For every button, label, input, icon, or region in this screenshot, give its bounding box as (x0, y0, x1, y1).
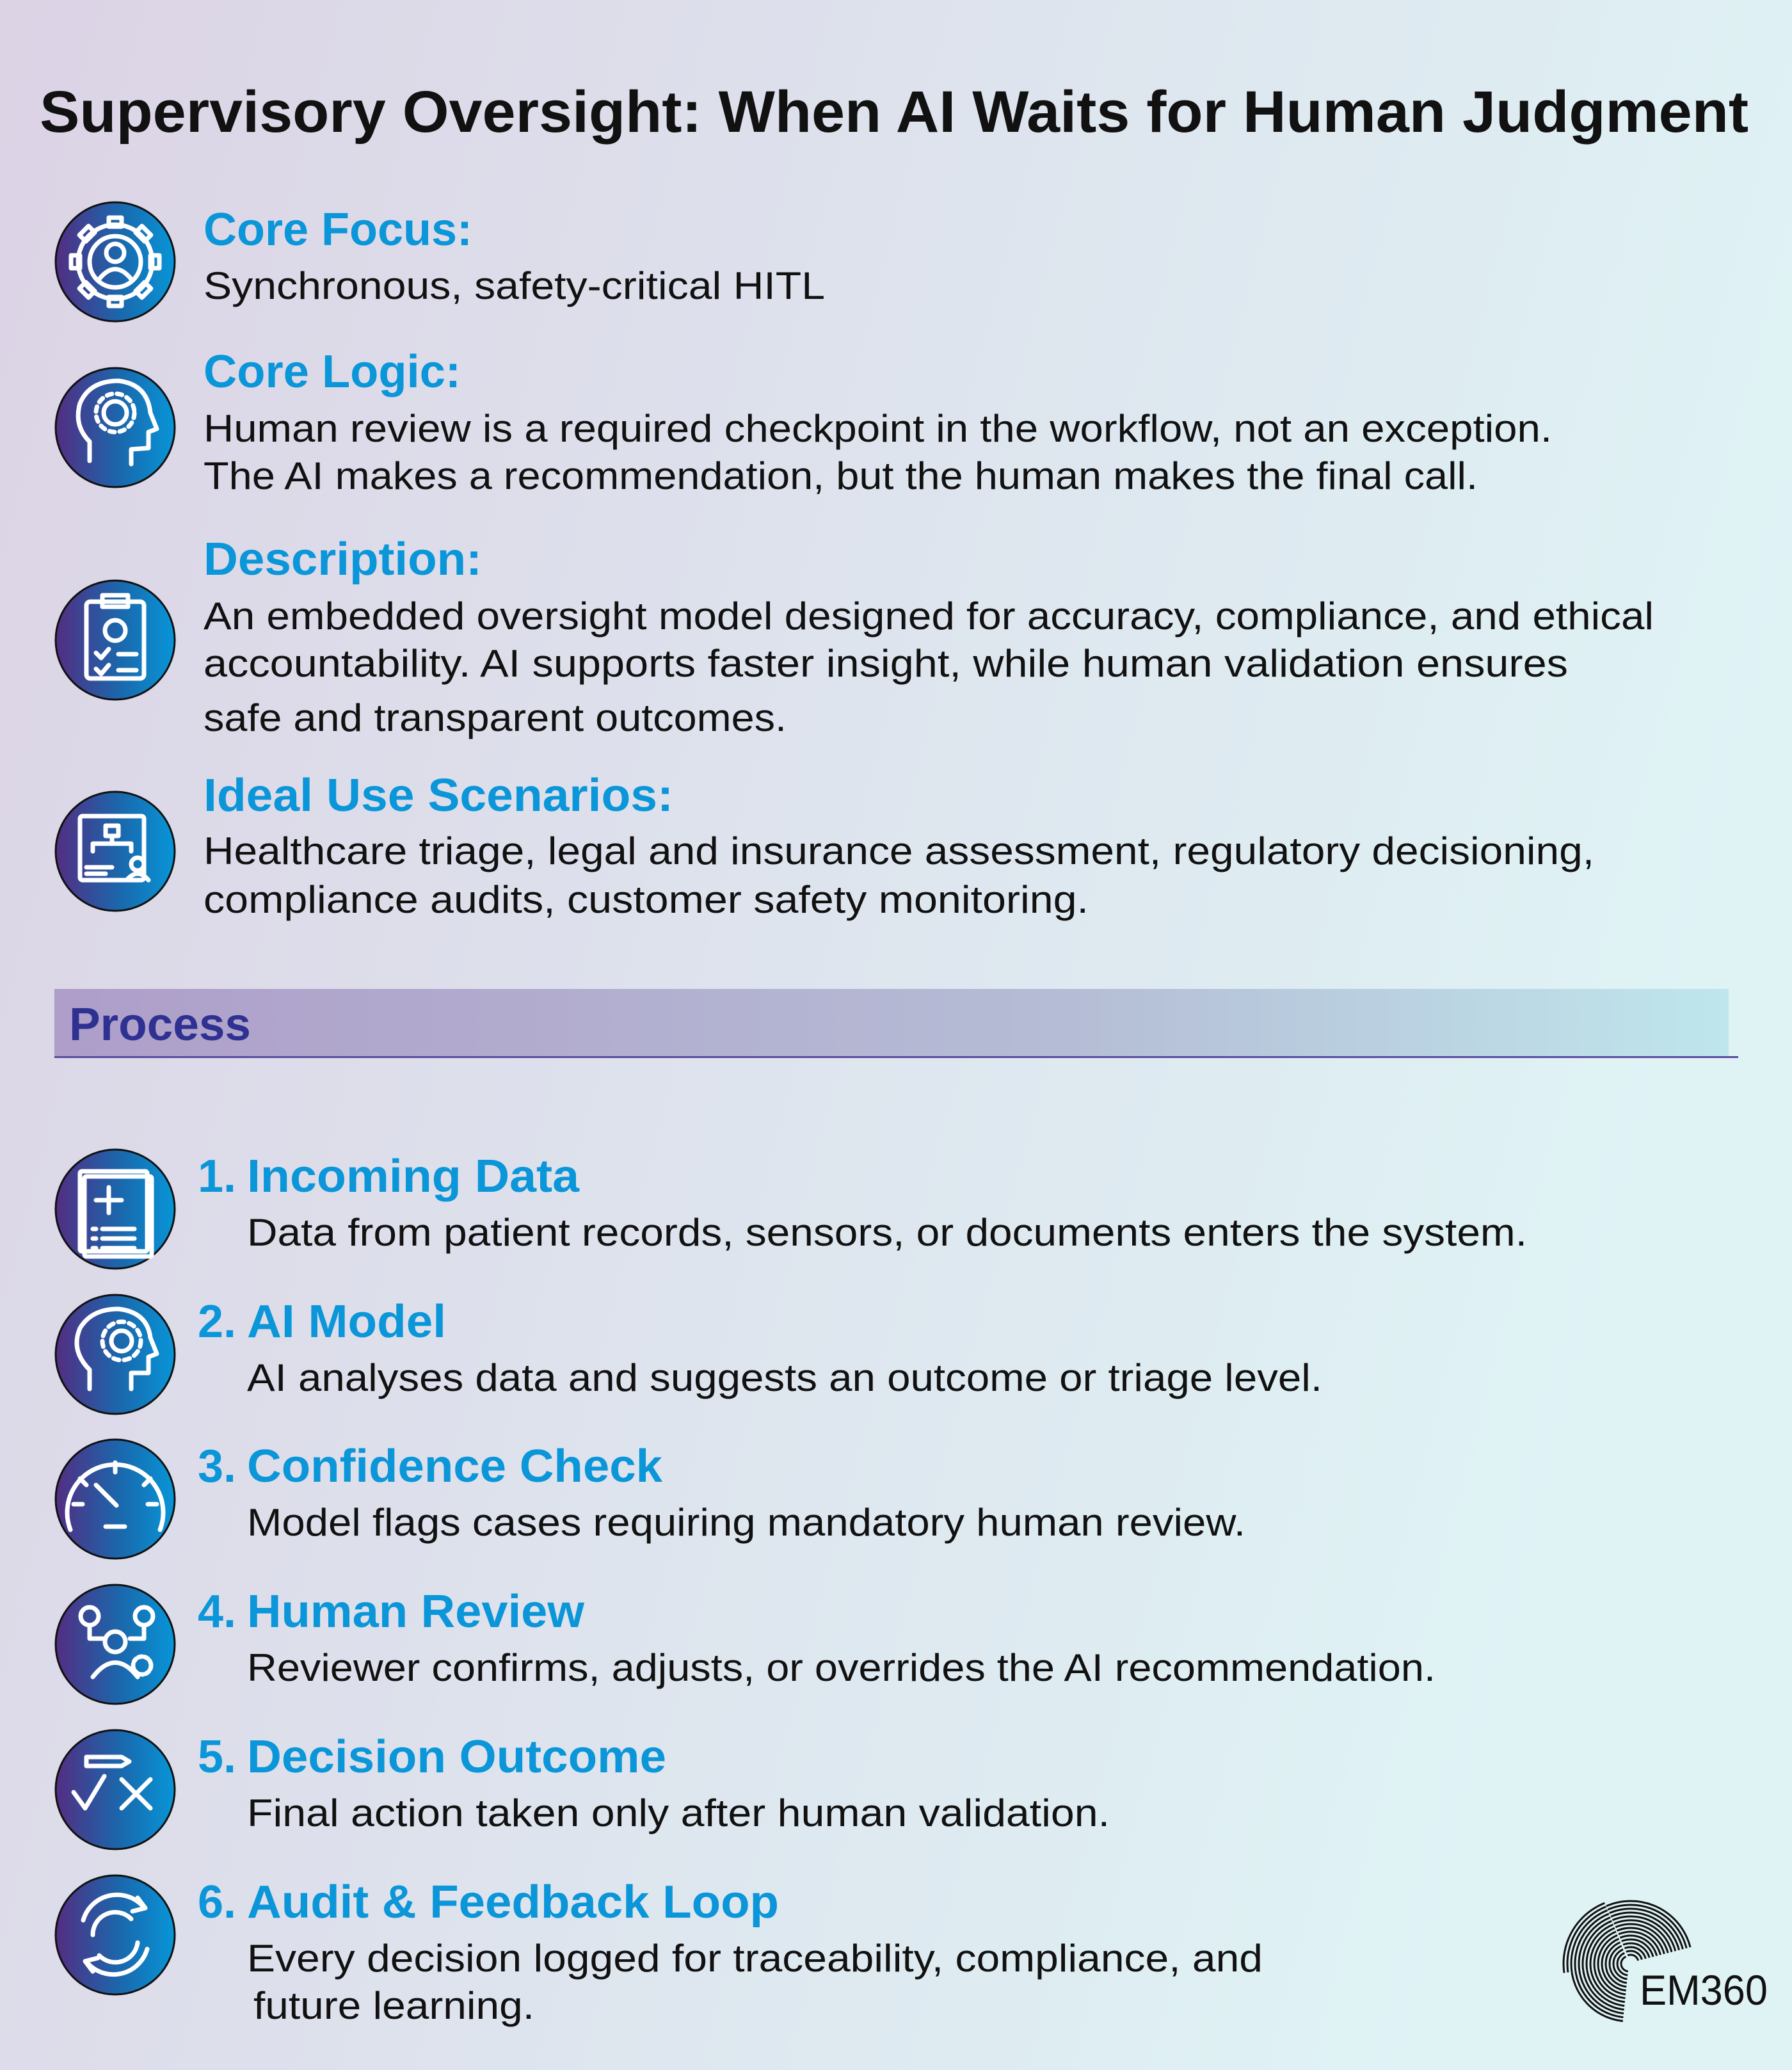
step 6: audit & feedback loop: Every decision logged for traceability, compliance, and (247, 1937, 1263, 1980)
icon: scenarios flowchart (56, 792, 175, 911)
process header bar (54, 989, 1738, 1058)
step 1: incoming data: Data from patient records, sensors, or documents enters the system. (247, 1211, 1527, 1254)
step 6: audit & feedback loop: 6. (198, 1877, 236, 1928)
step 1: incoming data: Incoming Data (247, 1151, 580, 1202)
step 3: confidence check (56, 1440, 1245, 1559)
step 3: confidence check: Model flags cases requiring mandatory human review. (247, 1501, 1245, 1544)
block: core focus (204, 204, 825, 307)
icon: core focus gear (56, 202, 175, 321)
step 2: ai model: AI Model (247, 1296, 446, 1347)
block: ideal use scenarios (204, 770, 1594, 921)
block: description (204, 534, 1654, 739)
block: description: Description: (204, 534, 482, 585)
block: core focus: Core Focus: (204, 204, 472, 255)
block: core logic: Core Logic: (204, 346, 461, 397)
block: core focus: Synchronous, safety-critical HITL (204, 264, 825, 307)
step 6: audit & feedback loop: Audit & Feedback Loop (247, 1877, 779, 1928)
block: ideal use scenarios: compliance audits, customer safety monitoring. (204, 878, 1089, 921)
block: ideal use scenarios: Healthcare triage, legal and insurance assessment, regulatory decisioning, (204, 830, 1594, 872)
block: ideal use scenarios: Ideal Use Scenarios: (204, 770, 673, 821)
step 2: ai model: AI analyses data and suggests an outcome or triage level. (247, 1356, 1322, 1399)
step 6: audit & feedback loop: future learning. (253, 1984, 534, 2027)
step 4: human review: Human Review (247, 1586, 585, 1637)
block: core logic (204, 346, 1552, 497)
step 1: incoming data (56, 1150, 1527, 1269)
step 5: decision outcome: 5. (198, 1731, 236, 1783)
icon: core logic head (56, 368, 175, 487)
icon: description clipboard (56, 581, 175, 700)
step 4: human review (56, 1585, 1436, 1704)
step 3: confidence check: Confidence Check (247, 1441, 663, 1492)
step 4: human review: Reviewer confirms, adjusts, or overrides the AI recommendation. (247, 1646, 1436, 1689)
step 4: human review: 4. (198, 1586, 236, 1637)
title: Supervisory Oversight: When AI Waits for Human Judgment (40, 79, 1748, 145)
step 6: audit & feedback loop (56, 1875, 1263, 2027)
step 3: confidence check: 3. (198, 1441, 236, 1492)
process header bar: Process (69, 999, 251, 1050)
block: description: safe and transparent outcomes. (204, 696, 787, 739)
block: description: An embedded oversight model designed for accuracy, compliance, and ethical (204, 595, 1654, 638)
step 2: ai model: 2. (198, 1296, 236, 1347)
block: core logic: Human review is a required checkpoint in the workflow, not an exception. (204, 407, 1552, 450)
step 5: decision outcome: Decision Outcome (247, 1731, 666, 1783)
block: description: accountability. AI supports faster insight, while human validation ensures (204, 642, 1568, 685)
logo: EM360 (1564, 1898, 1768, 2029)
step 5: decision outcome: Final action taken only after human validation. (247, 1792, 1110, 1834)
block: core logic: The AI makes a recommendation, but the human makes the final call. (204, 454, 1478, 497)
step 1: incoming data: 1. (198, 1151, 236, 1202)
step 2: ai model (56, 1295, 1322, 1414)
step 5: decision outcome (56, 1730, 1110, 1849)
logo: EM360: EM360 (1640, 1966, 1768, 2014)
